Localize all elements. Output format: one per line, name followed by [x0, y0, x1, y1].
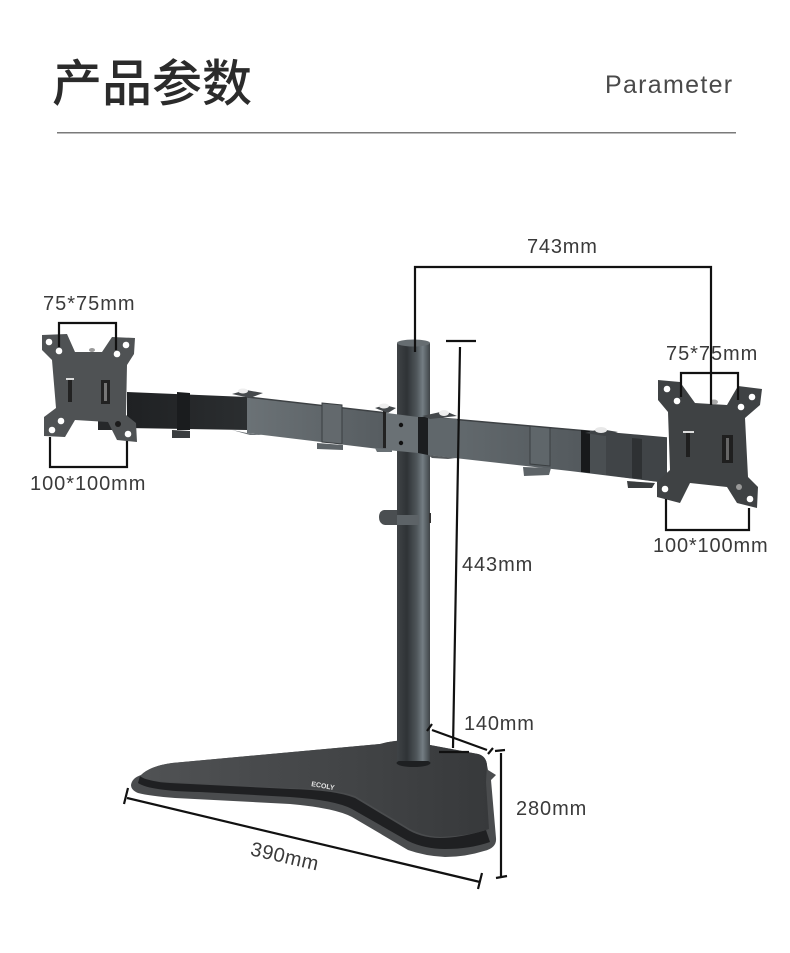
stand base [131, 741, 496, 857]
right arm [428, 417, 667, 488]
dimension: 390mm [124, 788, 482, 889]
centre bracket [375, 404, 457, 459]
base logo: ECOLY [311, 781, 335, 792]
pole [396, 340, 430, 767]
header rule [57, 132, 736, 134]
dimension: 390mm: 390mm [248, 838, 321, 876]
title: 产品参数 [52, 56, 252, 112]
dimension: 443mm [439, 341, 533, 752]
dimension: 743mm: 743mm [527, 236, 598, 258]
dimension: right 100*100mm: 100*100mm [653, 535, 768, 557]
dimension: 280mm [495, 750, 587, 878]
dimension: 140mm: 140mm [464, 713, 535, 735]
cable clip [379, 510, 431, 525]
dimension: left 100*100mm [30, 437, 146, 495]
dimension: 743mm [415, 236, 711, 405]
dimension: right 75*75mm: 75*75mm [666, 343, 758, 365]
subtitle: Parameter: Parameter [605, 71, 733, 99]
dimension: right 100*100mm [653, 499, 768, 557]
dimension: 140mm [427, 713, 535, 754]
dimension: 443mm: 443mm [462, 554, 533, 576]
dimension: right 75*75mm [666, 343, 758, 400]
dimension: 280mm: 280mm [516, 798, 587, 820]
dimension: left 100*100mm: 100*100mm [30, 473, 146, 495]
left VESA plate [42, 334, 137, 442]
dimension: left 75*75mm [43, 293, 136, 350]
right VESA plate [657, 380, 762, 508]
left arm [98, 388, 387, 450]
dimension: left 75*75mm: 75*75mm [43, 293, 136, 315]
